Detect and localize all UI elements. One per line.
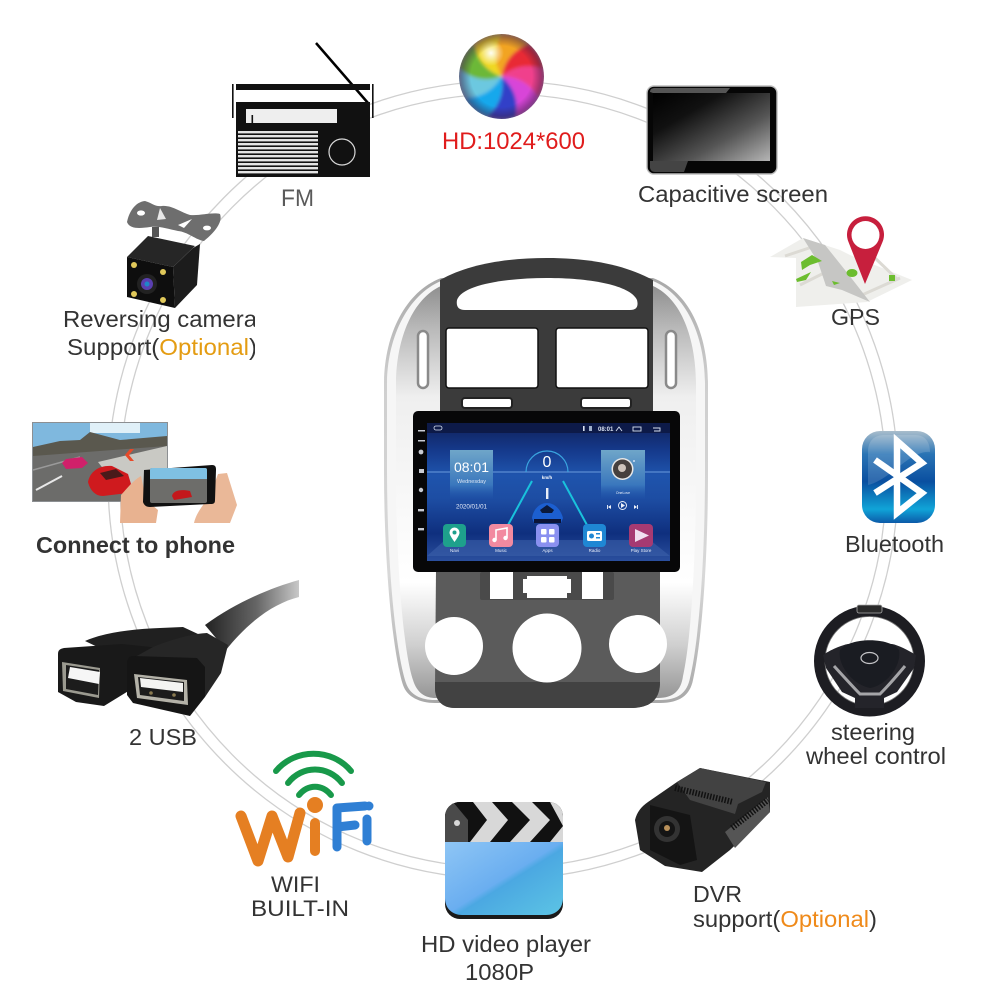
app icon Navi [443, 524, 466, 547]
label: Capacitive screen: Capacitive screen [638, 181, 828, 207]
pin hole [852, 221, 880, 249]
speed value: 0 [543, 454, 552, 471]
weekday text: Wednesday [457, 479, 486, 485]
icon: GPS map and pin [770, 216, 912, 307]
label: FM: FM [281, 185, 314, 212]
camera side [173, 244, 200, 308]
app labels: Apps [542, 548, 553, 553]
left hand [120, 476, 158, 523]
radio knob [329, 139, 355, 165]
bottom bezel highlight [650, 161, 688, 172]
camera top [127, 236, 195, 267]
top bezel highlight [650, 88, 730, 93]
music label: OneLove [616, 491, 630, 495]
icon: Bluetooth [862, 431, 935, 523]
status icons: 08:01 [598, 427, 614, 433]
app labels: Radio [589, 548, 601, 553]
icon: capacitive screen [647, 86, 777, 174]
label: WIFI BUILT-IN: WIFI [271, 872, 320, 897]
road lines [508, 481, 587, 525]
status icons [434, 426, 660, 433]
horizon band [427, 471, 670, 473]
top vents [675, 788, 733, 802]
spokes [823, 644, 916, 708]
tuner window [246, 109, 337, 123]
icon: DVR dash camera [635, 768, 770, 872]
ball edge shading [459, 34, 544, 119]
head unit screen [413, 411, 680, 572]
label: DVR support(Optional): support(Optional) [693, 906, 877, 932]
speedometer arc [526, 451, 568, 472]
letter F [337, 806, 365, 847]
camera front [127, 257, 175, 308]
clock text: 08:01 [454, 459, 489, 475]
base [445, 802, 563, 919]
label: Reversing camera Support(Optional): Support(Optional) [67, 334, 257, 360]
app icon Play Store [629, 524, 653, 547]
frame [647, 86, 777, 174]
LEDs [131, 262, 166, 303]
right hand [194, 473, 237, 523]
dark lower fascia [435, 570, 660, 708]
label: Connect to phone: Connect to phone [36, 532, 235, 558]
pin [847, 216, 884, 284]
symbol [875, 441, 922, 513]
icon: WiFi logo [241, 754, 374, 861]
label: HD:1024*600: HD:1024*600 [442, 128, 585, 155]
date text: 2020/01/01 [456, 504, 488, 510]
icon: colour ball [459, 34, 544, 120]
slot left [462, 398, 512, 408]
left plug front [58, 644, 160, 706]
body [635, 768, 770, 872]
knob hole left [425, 617, 483, 675]
stem [152, 227, 159, 237]
bracket holes [137, 208, 211, 230]
label: WIFI BUILT-IN: BUILT-IN [251, 896, 349, 921]
top mount [677, 768, 766, 814]
label: HD video player 1080P [421, 931, 591, 985]
connecting ring outer [108, 81, 898, 879]
display [653, 93, 770, 161]
white base [459, 34, 544, 119]
side panel [725, 797, 770, 848]
clock card [450, 450, 493, 500]
slot right [581, 398, 631, 408]
climate switch cutouts [490, 572, 603, 599]
silver trim [384, 278, 708, 703]
speed unit: km/h [542, 475, 552, 480]
label: steering wheel control [805, 719, 946, 769]
signal arcs [276, 754, 351, 795]
hinge dot [454, 820, 460, 826]
icon: FM radio [232, 43, 374, 177]
icon: steering wheel [820, 605, 920, 711]
green areas [796, 255, 895, 285]
label: DVR support(Optional) [693, 881, 877, 932]
status bar [427, 423, 670, 433]
TV screen [32, 422, 168, 502]
side clip left [418, 331, 428, 388]
rim [820, 611, 920, 711]
handle sides [232, 84, 234, 118]
left plug neck [85, 627, 198, 660]
silver trim [834, 666, 905, 694]
car graphic [532, 503, 563, 523]
right vent cutout [556, 328, 648, 388]
app labels: Play Store [631, 548, 652, 553]
letter W [241, 813, 300, 861]
app labels [450, 548, 652, 553]
label: Reversing camera Support(Optional): Reversing camera [63, 306, 257, 332]
app labels: Music [495, 548, 508, 553]
side clip right [666, 331, 676, 388]
swirl petals [459, 34, 544, 120]
map roads [785, 246, 900, 295]
label: WIFI BUILT-IN [251, 872, 349, 921]
mounting bracket [127, 201, 221, 241]
emblem [861, 652, 878, 664]
dock band [427, 540, 670, 556]
wallpaper [427, 423, 670, 561]
antenna [316, 43, 368, 103]
icon: HD video clapperboard [445, 802, 563, 919]
phone screen [150, 468, 207, 503]
label: Reversing camera Support(Optional) [63, 306, 257, 360]
label: steering wheel control: wheel control [805, 743, 946, 769]
app icon Music [489, 524, 513, 547]
left vent cutout [446, 328, 538, 388]
road center mark [546, 488, 548, 499]
knob hole right [609, 615, 667, 673]
app labels: Navi [450, 548, 459, 553]
left hinge block [445, 802, 468, 842]
bezel [413, 411, 680, 572]
map fold [803, 238, 870, 302]
knob hole middle [512, 614, 582, 682]
TV scene [33, 423, 167, 501]
lens housing [650, 805, 697, 865]
tile highlight [868, 435, 930, 485]
music card [601, 450, 645, 500]
side buttons [418, 430, 425, 530]
label: GPS: GPS [831, 304, 880, 330]
side vents [732, 800, 768, 828]
tile [862, 431, 935, 523]
blue body [445, 841, 563, 915]
album avatar [612, 458, 635, 480]
map sheet [770, 238, 912, 307]
right plug neck [135, 633, 228, 697]
app icon Apps [536, 524, 559, 547]
icon: phone mirror link [32, 422, 237, 523]
label: 2 USB: 2 USB [129, 724, 197, 750]
right port [134, 674, 188, 705]
lower fascia bottom band [435, 682, 660, 708]
icon: reversing camera [127, 201, 221, 308]
right plug front [127, 656, 205, 716]
letter i blue [364, 802, 374, 841]
central dash panel [384, 258, 708, 708]
letter i orange [307, 797, 323, 851]
label: DVR support(Optional): DVR [693, 881, 742, 907]
tuner needle [252, 115, 253, 123]
music controls [607, 502, 638, 510]
lens [654, 816, 680, 842]
ball highlight [478, 40, 504, 66]
top window cutout [457, 278, 638, 310]
radio body [236, 102, 370, 177]
clapper top [445, 802, 563, 842]
left port [62, 662, 100, 698]
app icon Radio [583, 524, 606, 547]
handle bar [236, 84, 370, 90]
icon: dual USB cable [58, 580, 299, 716]
speaker grille [238, 131, 318, 173]
phone body [143, 465, 216, 507]
label: Bluetooth: Bluetooth [845, 531, 944, 557]
label: HD video player 1080P: HD video player [421, 931, 591, 957]
lens [137, 274, 157, 294]
connecting ring inner [120, 94, 886, 868]
hub airbag [840, 640, 899, 688]
top clip [857, 605, 882, 613]
label: steering wheel control: steering [831, 719, 915, 745]
light chevrons [470, 802, 563, 842]
label: HD video player 1080P: 1080P [465, 959, 534, 985]
climate switch recess [480, 572, 614, 600]
dark upper fascia [440, 258, 653, 415]
cable [205, 580, 299, 650]
